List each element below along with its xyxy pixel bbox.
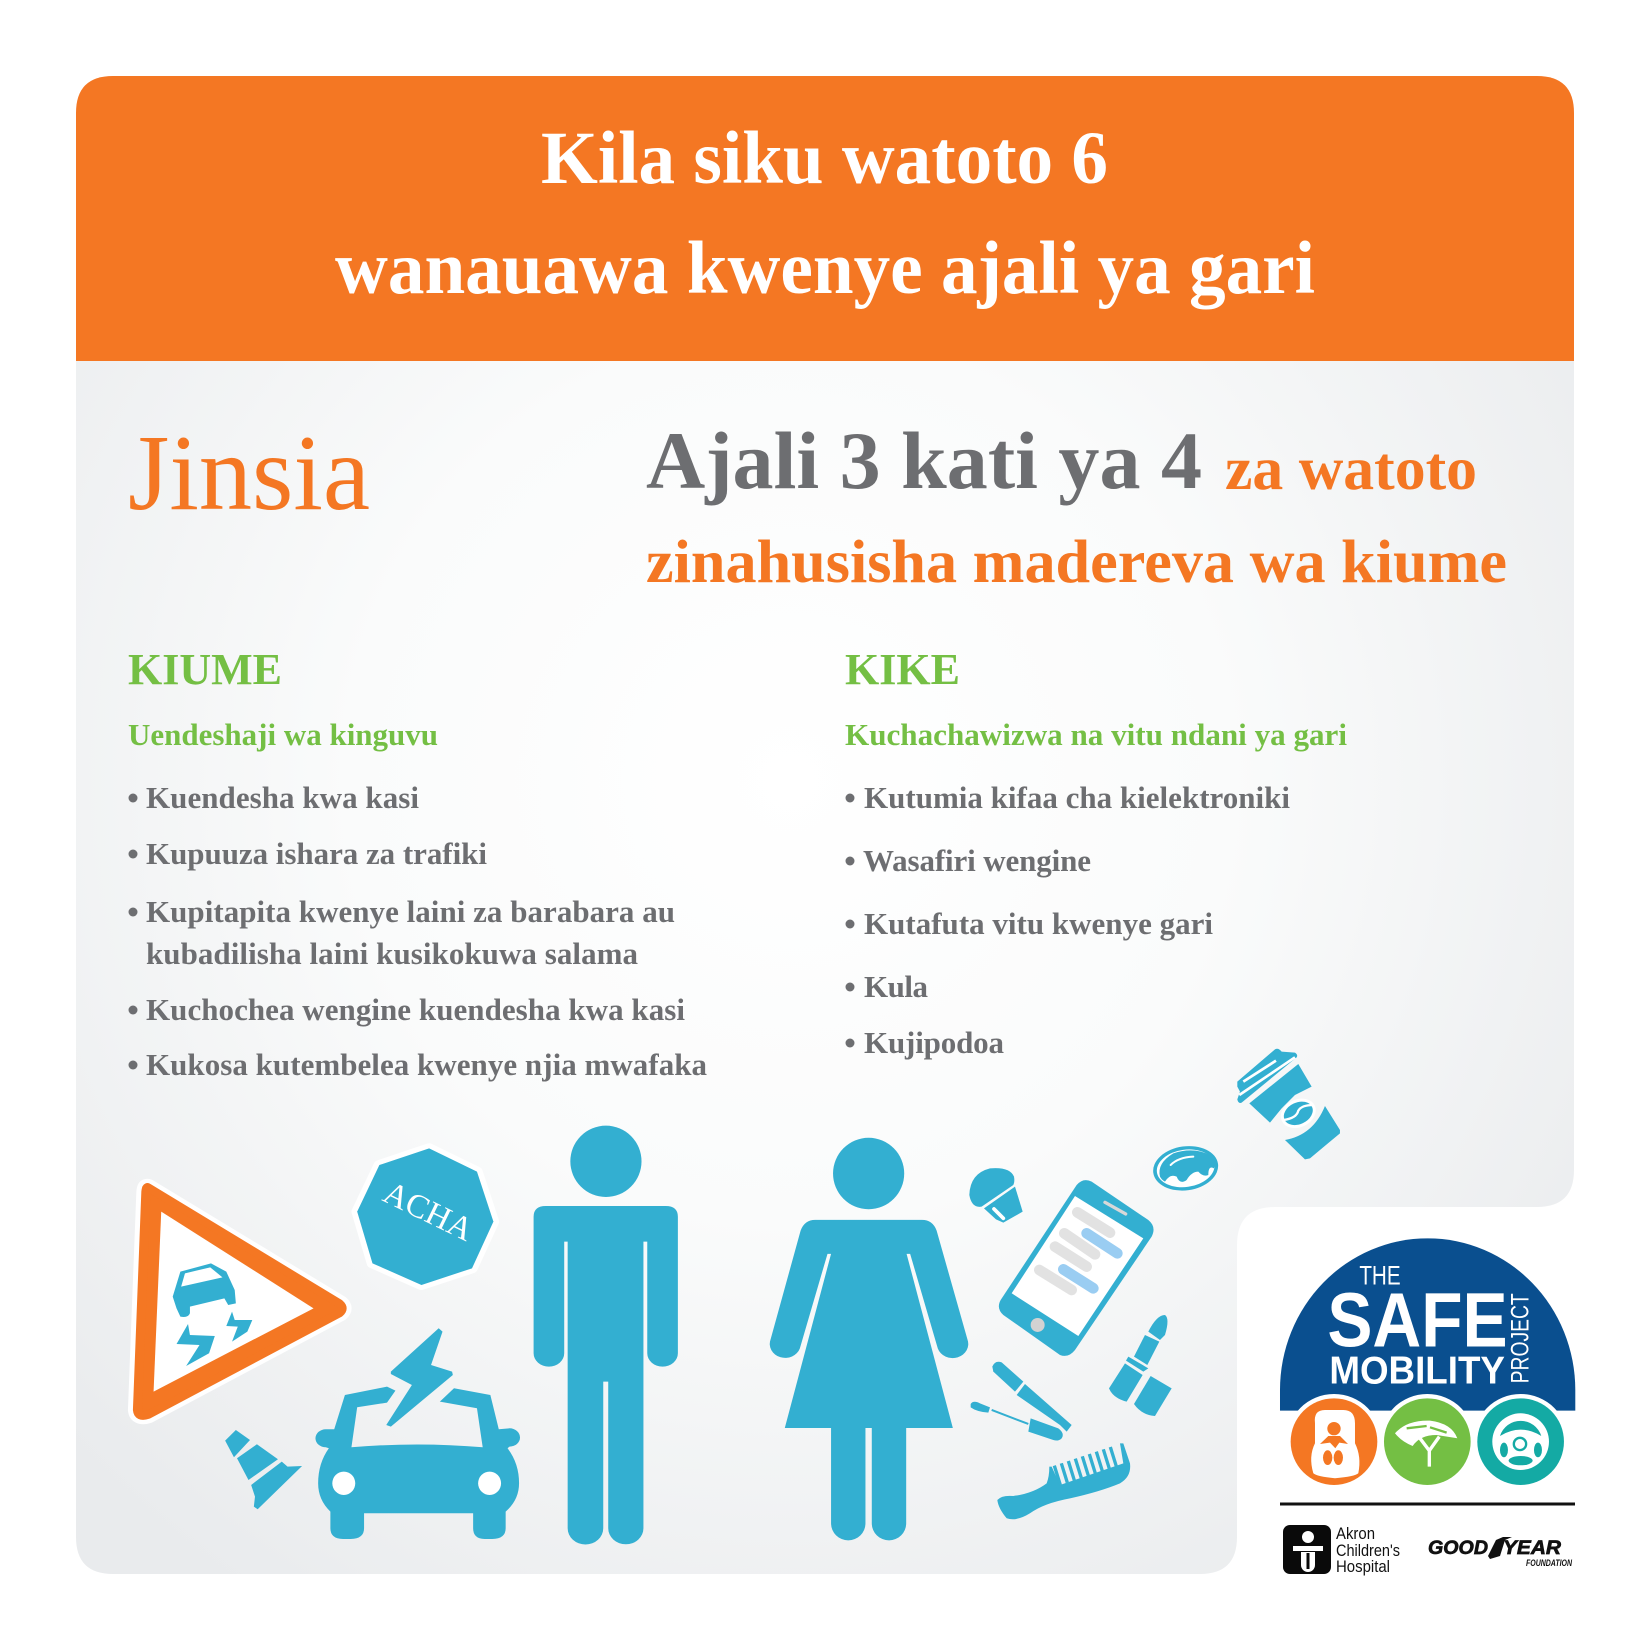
logo text: THE bbox=[1359, 1260, 1401, 1290]
column: KIUME: Kupuuza ishara za trafiki bbox=[146, 836, 487, 871]
icon: stop sign bbox=[357, 1148, 493, 1285]
column: KIKE: Kutafuta vitu kwenye gari bbox=[864, 906, 1213, 941]
heading: Jinsia: Jinsia bbox=[128, 414, 370, 533]
column: KIKE: Kula bbox=[864, 969, 928, 1004]
column: KIUME: Kuendesha kwa kasi bbox=[146, 780, 419, 815]
icon: traffic cone bbox=[225, 1430, 302, 1509]
icon: mascara bbox=[971, 1362, 1072, 1441]
column: KIKE: Kutumia kifaa cha kielektroniki bbox=[864, 780, 1290, 815]
column: KIKE: KIKE bbox=[845, 645, 960, 694]
icon: bike helmet bbox=[1380, 1394, 1475, 1489]
column: KIKE bbox=[845, 645, 1347, 1060]
logo text: PROJECT bbox=[1506, 1293, 1534, 1383]
icon: comb bbox=[997, 1443, 1130, 1519]
icon: muffin bbox=[969, 1168, 1023, 1223]
statistic headline: Ajali 3 kati ya 4 bbox=[646, 415, 1202, 506]
column: KIKE: Wasafiri wengine bbox=[863, 843, 1091, 878]
column: KIUME: kubadilisha laini kusikokuwa salama bbox=[146, 936, 638, 971]
column: KIUME: Kuchochea wengine kuendesha kwa kasi bbox=[146, 992, 685, 1027]
logo: Goodyear Foundation: FOUNDATION bbox=[1526, 1558, 1572, 1568]
icon: smartphone with chat bbox=[999, 1180, 1154, 1356]
column: KIKE: Kuchachawizwa na vitu ndani ya gari bbox=[845, 717, 1347, 752]
logo dome bbox=[1280, 1238, 1575, 1411]
logo: Goodyear Foundation bbox=[1428, 1537, 1572, 1568]
statistic headline: za watoto bbox=[1225, 436, 1477, 503]
icon: steering wheel bbox=[1473, 1394, 1568, 1489]
logo: Akron Children's Hospital: Children's bbox=[1336, 1541, 1400, 1560]
logo text: MOBILITY bbox=[1329, 1348, 1505, 1392]
icon: crashed car with lightning bolt bbox=[315, 1328, 520, 1539]
icon: doughnut bbox=[1150, 1142, 1221, 1195]
icon: stop sign: ACHA bbox=[377, 1175, 479, 1249]
icon: warning triangle bbox=[138, 1187, 342, 1416]
title line 1: Kila siku watoto 6 bbox=[541, 117, 1108, 200]
logo text: SAFE bbox=[1327, 1278, 1508, 1364]
logo: Akron Children's Hospital: Akron bbox=[1336, 1524, 1375, 1543]
logo: Goodyear Foundation: YEAR bbox=[1503, 1538, 1561, 1559]
column: KIUME: Kupitapita kwenye laini za barabara au bbox=[146, 894, 675, 929]
column: KIKE: Kujipodoa bbox=[864, 1025, 1004, 1060]
logo: Safe Mobility Project bbox=[1280, 1238, 1575, 1489]
column: KIUME bbox=[128, 645, 708, 1082]
logo: Akron Children's Hospital bbox=[1283, 1524, 1400, 1576]
icon: male figure bbox=[534, 1126, 678, 1544]
column: KIUME: KIUME bbox=[128, 645, 282, 694]
icon: car seat bbox=[1286, 1394, 1382, 1489]
title line 2: wanauawa kwenye ajali ya gari bbox=[335, 227, 1315, 310]
column: KIUME: Kukosa kutembelea kwenye njia mwafaka bbox=[146, 1047, 708, 1082]
logo text bbox=[1327, 1260, 1534, 1392]
statistic headline: zinahusisha madereva wa kiume bbox=[646, 529, 1507, 596]
icon: female figure bbox=[770, 1138, 968, 1540]
column: KIUME: Uendeshaji wa kinguvu bbox=[128, 717, 438, 752]
logo: Goodyear Foundation: GOOD bbox=[1428, 1538, 1488, 1559]
icon: coffee cup bbox=[1237, 1049, 1340, 1159]
header banner bbox=[76, 76, 1574, 361]
icon: lipstick bbox=[1109, 1315, 1172, 1416]
statistic headline bbox=[646, 415, 1507, 596]
panel: background with notch bbox=[76, 361, 1574, 1574]
divider line bbox=[1280, 1502, 1575, 1506]
logo: Akron Children's Hospital: Hospital bbox=[1336, 1557, 1390, 1576]
